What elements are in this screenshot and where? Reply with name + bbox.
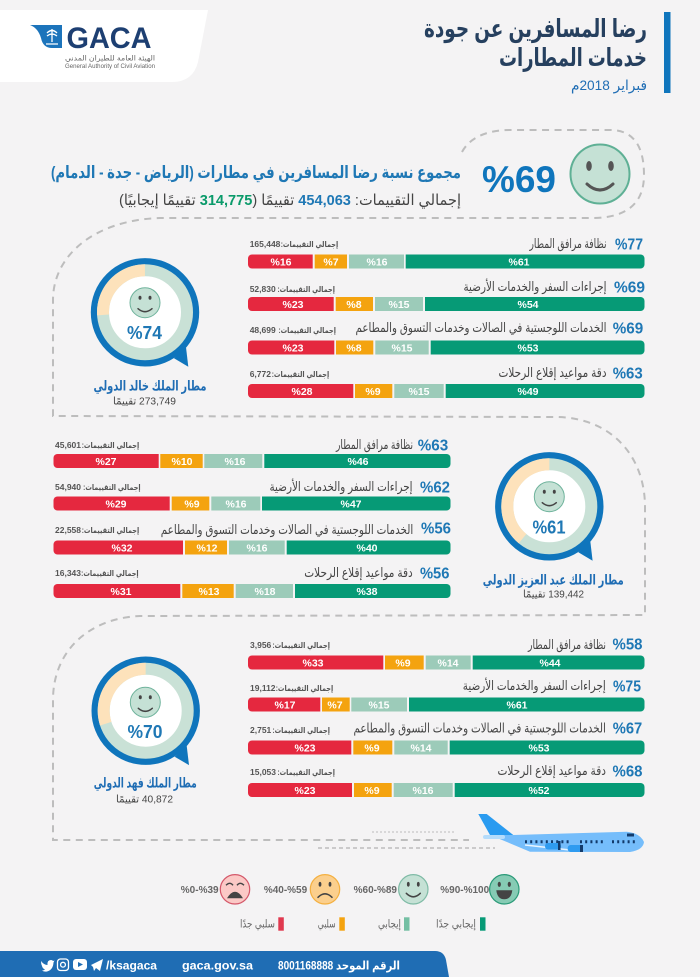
social handle: /ksagaca (106, 958, 157, 972)
row: travel procedures (248, 278, 645, 311)
airport percentage: %61 (532, 518, 566, 538)
stacked bar: %16 (366, 256, 388, 268)
airport ratings: 40,872 تقييمًا (116, 794, 173, 806)
icon: airplane (318, 814, 644, 852)
stacked bar: %29 (105, 498, 127, 510)
row: cleanliness: نظافة مرافق المطار (527, 637, 606, 653)
stacked bar: %9 (365, 386, 381, 398)
legend: colour key: إيجابي (378, 918, 401, 930)
donut chart (490, 447, 608, 565)
row: travel procedures: إجمالي التقييمات: (276, 684, 333, 693)
row: cleanliness (248, 236, 645, 268)
stacked bar (248, 384, 645, 398)
stacked bar: %14 (437, 658, 459, 670)
stacked bar: %13 (198, 586, 220, 598)
contact number: الرقم الموحد 8001168888 (278, 958, 400, 974)
donut chart (94, 262, 196, 367)
row: flight punctuality (248, 763, 645, 797)
row: travel procedures (248, 677, 645, 712)
row: travel procedures: إجمالي التقييمات: (83, 483, 141, 492)
stacked bar: %46 (347, 456, 369, 468)
summary heading: مجموع نسبة رضا المسافرين في مطارات (الرياض - جدة - الدمام) (51, 163, 461, 183)
stacked bar (54, 540, 451, 554)
row: travel procedures: إجمالي التقييمات: (277, 285, 335, 294)
stacked bar: %47 (340, 498, 362, 510)
row: flight punctuality: 6,772 (250, 369, 271, 379)
icon: youtube (73, 959, 87, 970)
stacked bar: %15 (368, 700, 390, 712)
row: logistics services (248, 720, 645, 754)
stacked bar: %9 (364, 785, 380, 797)
stacked bar: %15 (388, 299, 410, 311)
row: logistics services: الخدمات اللوجستية في الصالات وخدمات التسوق والمطاعم (161, 522, 413, 538)
row: flight punctuality (54, 565, 451, 598)
panel: King Fahd airport badge (93, 658, 199, 806)
row: travel procedures: 52,830 (250, 284, 276, 294)
row: logistics services: %67 (613, 720, 642, 738)
stacked bar: %23 (282, 299, 304, 311)
stacked bar: %23 (294, 785, 316, 797)
row: flight punctuality: إجمالي التقييمات: (81, 569, 139, 578)
stacked bar: %53 (528, 742, 550, 754)
title accent bar (664, 12, 670, 93)
footer bar (0, 951, 449, 977)
icon: telegram (91, 959, 103, 971)
stacked bar: %23 (294, 742, 316, 754)
range label: %60-%89 (354, 885, 397, 896)
icon: smiley (534, 482, 564, 512)
stacked bar: %16 (224, 456, 246, 468)
stacked bar: %61 (508, 256, 530, 268)
stacked bar: %12 (196, 542, 218, 554)
row: travel procedures: %75 (613, 678, 641, 696)
title (424, 15, 647, 94)
stacked bar: %16 (225, 498, 247, 510)
stacked bar: %54 (517, 299, 539, 311)
row: flight punctuality: %68 (612, 764, 643, 780)
stacked bar: %40 (356, 542, 378, 554)
stacked bar: %53 (517, 342, 539, 354)
stacked bar: %14 (410, 742, 432, 754)
stacked bar: %61 (506, 700, 528, 712)
row: logistics services: %56 (421, 520, 451, 538)
logo arabic name: الهيئة العامة للطيران المدني (65, 56, 155, 62)
stacked bar: %9 (395, 658, 411, 670)
stacked bar: %31 (110, 586, 132, 598)
row: travel procedures: %62 (420, 480, 450, 496)
stacked bar: %10 (171, 456, 193, 468)
panel: King Fahd rows (248, 636, 645, 797)
row: cleanliness: إجمالي التقييمات: (272, 641, 330, 650)
panel: King Abdulaziz airport badge (483, 447, 624, 600)
airport name: مطار الملك فهد الدولي (94, 774, 197, 792)
row: cleanliness: نظافة مرافق المطار (335, 437, 413, 453)
airport ratings: 139,442 تقييمًا (523, 588, 584, 600)
stacked bar (248, 740, 645, 754)
stacked bar (248, 698, 645, 712)
stacked bar: %8 (346, 342, 362, 354)
overall percentage: %69 (482, 159, 556, 200)
title: خدمات المطارات (499, 44, 647, 72)
row: flight punctuality: 16,343 (55, 568, 81, 578)
logo english name: General Authority of Civil Aviation (65, 64, 155, 70)
summary totals: إجمالي التقييمات: 454,063 تقييمًا (314,775 تقييمًا إيجابيًا) (119, 192, 461, 210)
airport name: مطار الملك عبد العزيز الدولي (483, 572, 624, 588)
row: flight punctuality: دقة مواعيد إقلاع الرحلات (498, 365, 607, 381)
panel: King Abdulaziz rows (54, 437, 451, 598)
icon: smiley (130, 687, 160, 717)
row: travel procedures: 54,940 (55, 482, 81, 492)
row: cleanliness: %58 (612, 636, 643, 654)
stacked bar: %27 (95, 456, 117, 468)
row: cleanliness: نظافة مرافق المطار (529, 236, 606, 252)
row: cleanliness: %63 (418, 438, 449, 454)
row: cleanliness: 45,601 (55, 440, 81, 450)
icon: very happy face (490, 875, 519, 904)
row: flight punctuality: دقة مواعيد إقلاع الرحلات (304, 565, 413, 581)
stacked bar (248, 783, 645, 797)
legend: colour key: سلبي جدًا (240, 918, 275, 930)
icon: smiley (130, 288, 160, 318)
stacked bar (54, 454, 451, 468)
legend: colour key: سلبي (318, 918, 336, 930)
stacked bar: %23 (282, 342, 304, 354)
stacked bar: %33 (302, 658, 324, 670)
range label: %0-%39 (181, 885, 219, 896)
row: logistics services: 22,558 (55, 525, 81, 535)
stacked bar (248, 297, 645, 311)
icon: instagram (58, 959, 68, 970)
row: travel procedures: إجراءات السفر والخدمات الأرضية (463, 677, 606, 694)
stacked bar: %16 (412, 785, 434, 797)
logo panel (0, 10, 208, 82)
stacked bar: %17 (274, 700, 296, 712)
stacked bar (248, 254, 645, 268)
row: logistics services: %69 (613, 320, 644, 338)
icon: crying face (220, 875, 250, 904)
icon: big smiley (570, 144, 630, 204)
stacked bar: %16 (246, 542, 268, 554)
row: logistics services (54, 520, 451, 554)
row: logistics services: إجمالي التقييمات: (278, 326, 336, 335)
stacked bar: %16 (270, 256, 292, 268)
row: travel procedures: 19,112 (250, 683, 276, 693)
range label: %90-%100 (440, 885, 490, 896)
stacked bar (54, 496, 451, 510)
row: logistics services: 2,751 (250, 725, 272, 735)
icon: GACA flag (30, 25, 62, 48)
airport ratings: 273,749 تقييمًا (113, 396, 176, 408)
row: travel procedures (54, 478, 451, 510)
summary (51, 144, 630, 210)
row: travel procedures: %69 (614, 280, 645, 296)
row: flight punctuality: إجمالي التقييمات: (277, 768, 335, 777)
panel: King Khalid airport badge (94, 262, 206, 408)
row: flight punctuality: 15,053 (250, 767, 276, 777)
legend: colour key: إيجابي جدًا (436, 918, 476, 930)
row: logistics services: الخدمات اللوجستية في الصالات وخدمات التسوق والمطاعم (353, 720, 606, 736)
row: cleanliness: إجمالي التقييمات: (281, 240, 338, 249)
stacked bar: %49 (517, 386, 539, 398)
legend: faces (181, 875, 519, 904)
stacked bar: %52 (528, 785, 550, 797)
stacked bar (248, 656, 645, 670)
stacked bar: %15 (391, 342, 413, 354)
row: travel procedures: إجراءات السفر والخدمات الأرضية (270, 478, 412, 495)
range label: %40-%59 (264, 885, 308, 896)
icon: sad face (310, 875, 340, 904)
icon: twitter (41, 960, 54, 972)
row: travel procedures: إجراءات السفر والخدمات الأرضية (464, 278, 606, 295)
date: فبراير 2018م (571, 77, 647, 94)
stacked bar (248, 340, 645, 354)
row: cleanliness (248, 636, 645, 670)
stacked bar: %9 (364, 742, 380, 754)
stacked bar: %44 (539, 658, 561, 670)
airport percentage: %70 (128, 722, 162, 742)
stacked bar: %7 (323, 256, 339, 268)
row: cleanliness: %77 (615, 236, 643, 254)
stacked bar: %8 (346, 299, 362, 311)
row: cleanliness: 3,956 (250, 640, 272, 650)
row: flight punctuality: إجمالي التقييمات: (272, 370, 329, 379)
row: cleanliness: 165,448 (250, 239, 281, 249)
row: flight punctuality: %63 (613, 366, 643, 382)
donut chart (93, 658, 199, 765)
row: logistics services (248, 320, 645, 354)
stacked bar: %7 (327, 700, 343, 712)
stacked bar: %18 (254, 586, 276, 598)
row: flight punctuality (248, 365, 645, 398)
stacked bar: %32 (111, 542, 133, 554)
row: cleanliness (54, 437, 451, 468)
airport name: مطار الملك خالد الدولي (94, 378, 206, 394)
stacked bar: %15 (408, 386, 430, 398)
airport percentage: %74 (127, 323, 162, 343)
stacked bar: %28 (291, 386, 313, 398)
stacked bar: %9 (184, 498, 200, 510)
stacked bar (54, 584, 451, 598)
row: logistics services: الخدمات اللوجستية في الصالات وخدمات التسوق والمطاعم (356, 320, 606, 336)
row: flight punctuality: %56 (420, 566, 450, 582)
panel: King Khalid rows (248, 236, 645, 398)
stacked bar: %38 (356, 586, 378, 598)
row: logistics services: إجمالي التقييمات: (82, 526, 139, 535)
row: cleanliness: إجمالي التقييمات: (82, 441, 139, 450)
website: gaca.gov.sa (182, 958, 253, 972)
logo wordmark: GACA (66, 22, 152, 55)
row: logistics services: إجمالي التقييمات: (272, 726, 330, 735)
icon: happy face (399, 875, 428, 904)
row: logistics services: 48,699 (250, 325, 276, 335)
row: flight punctuality: دقة مواعيد إقلاع الرحلات (497, 763, 606, 779)
legend: colour key (240, 917, 486, 931)
